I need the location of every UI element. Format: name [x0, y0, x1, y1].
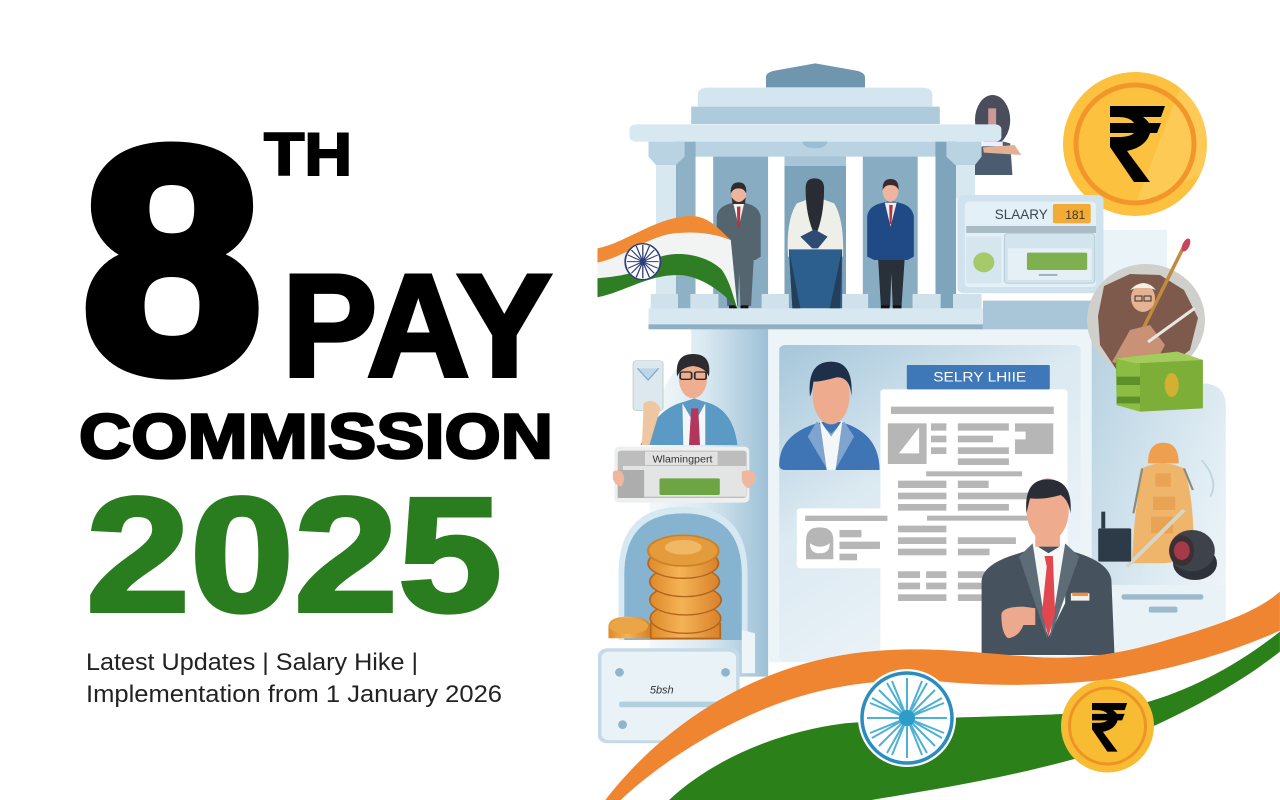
- subtitle: [86, 649, 502, 708]
- icon: rupee sign: [1110, 106, 1165, 182]
- portrait: official: [779, 362, 880, 470]
- salary card: 181: [1065, 208, 1086, 222]
- nameplate box: [598, 630, 755, 743]
- salary card: [957, 195, 1103, 293]
- right wing panel: [1092, 320, 1226, 673]
- backpack: [1127, 443, 1213, 567]
- PAY: PAY: [282, 244, 552, 407]
- official in blue suit: [867, 179, 914, 308]
- TH superscript: TH: [264, 121, 352, 188]
- subtitle: Latest Updates | Salary Hike |: [86, 649, 418, 676]
- large official in dark suit: [982, 478, 1114, 655]
- building: government colonnade: [630, 63, 1092, 329]
- salary document: [797, 389, 1067, 656]
- officials standing in colonnade: [717, 178, 914, 308]
- white band: [621, 627, 1280, 800]
- year 2025: 2025: [86, 463, 502, 646]
- rupee coin: [1063, 72, 1207, 216]
- official with card: [613, 354, 756, 503]
- banner: salary hike: [907, 365, 1050, 389]
- numeral 8: 8: [82, 83, 262, 438]
- icon: small rupee sign: [1092, 703, 1127, 752]
- small flag of India: [597, 216, 737, 308]
- green band: [669, 632, 1280, 800]
- pale backing panel: [1100, 230, 1167, 340]
- subtitle: Implementation from 1 January 2026: [86, 681, 502, 708]
- green cash bundle: [1116, 352, 1203, 412]
- woman seated on cornice: [974, 95, 1021, 175]
- COMMISSION: COMMISSION: [79, 402, 553, 472]
- coin stack in arch: [608, 507, 748, 640]
- roof tiers: [630, 88, 1001, 157]
- veteran medallion: [1087, 237, 1205, 376]
- official with card: Wlamingpert: [652, 455, 713, 466]
- columns: [649, 142, 982, 308]
- banner: salary hike: SELRY LHIIE: [933, 369, 1026, 385]
- radio and lens: [1098, 512, 1217, 580]
- orange band: [605, 592, 1280, 800]
- salary card: SLAARY: [995, 207, 1048, 222]
- plinths and platform: [651, 294, 982, 309]
- Ashoka chakra: [858, 669, 956, 767]
- tricolour swoosh: [605, 592, 1280, 800]
- dome: [766, 63, 865, 87]
- nameplate box: 5bsh: [650, 684, 674, 696]
- building lower wall: [649, 329, 1092, 677]
- official in grey suit: [717, 182, 761, 308]
- woman in shawl and blue skirt: [788, 178, 843, 308]
- small rupee coin: [1061, 680, 1154, 772]
- title: [79, 83, 553, 646]
